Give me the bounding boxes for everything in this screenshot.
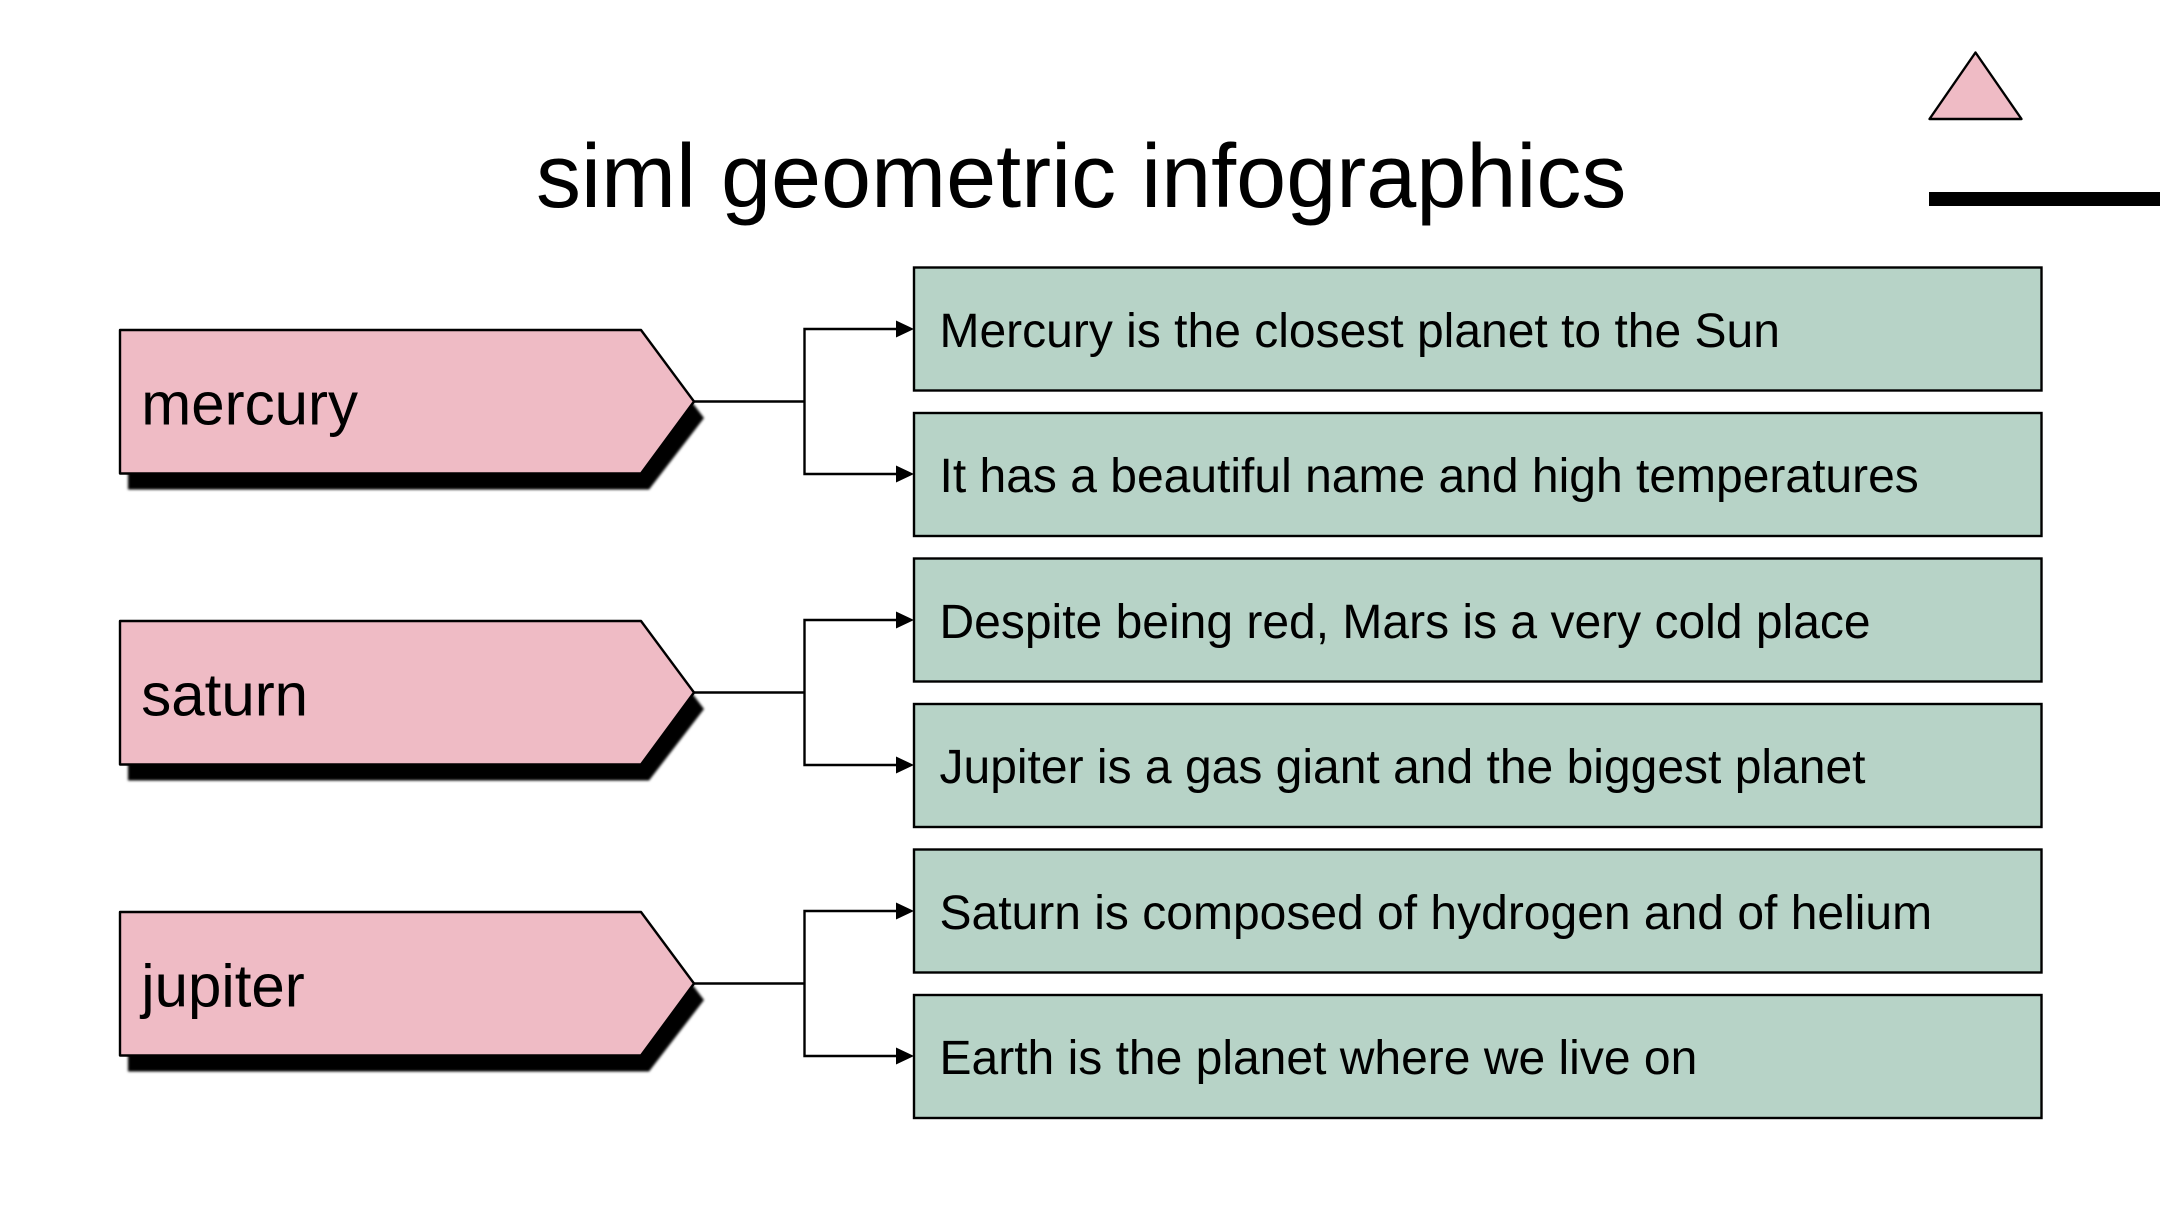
box: Mercury fact [914,268,2042,390]
icon: triangle [1930,52,2022,119]
label shape shadow: mercury [128,346,704,490]
label: saturn: saturn [141,662,308,728]
box: name fact: It has a beautiful name and high temperatures [940,450,1919,503]
box: Mercury fact: Mercury is the closest planet to the Sun [940,305,1780,358]
group: mercury [120,268,2042,536]
box: Saturn fact [914,850,2042,972]
label shape shadow: jupiter [128,928,704,1072]
box: Earth fact [914,995,2042,1118]
label shape: saturn [120,621,694,764]
box: Jupiter fact [914,704,2042,827]
label shape: mercury [120,330,694,474]
connector: jupiter [694,902,914,1064]
label: jupiter: jupiter [139,952,305,1020]
label shape shadow: saturn [128,637,704,780]
box: Jupiter fact: Jupiter is a gas giant and the biggest planet [940,741,1865,794]
group: saturn [120,558,2042,827]
connector: mercury [694,320,914,482]
box: Mars fact: Despite being red, Mars is a very cold place [940,596,1871,649]
label shape: jupiter [120,912,694,1056]
group: jupiter [120,850,2042,1118]
label: mercury: mercury [141,370,358,438]
box: Earth fact: Earth is the planet where we live on [940,1032,1697,1085]
decorative black bar [1929,192,2160,206]
box: Mars fact [914,558,2042,682]
box: Saturn fact: Saturn is composed of hydrogen and of helium [940,887,1932,940]
box: name fact [914,413,2042,536]
connector: saturn [694,612,914,774]
title: siml geometric infographics [536,127,1626,227]
